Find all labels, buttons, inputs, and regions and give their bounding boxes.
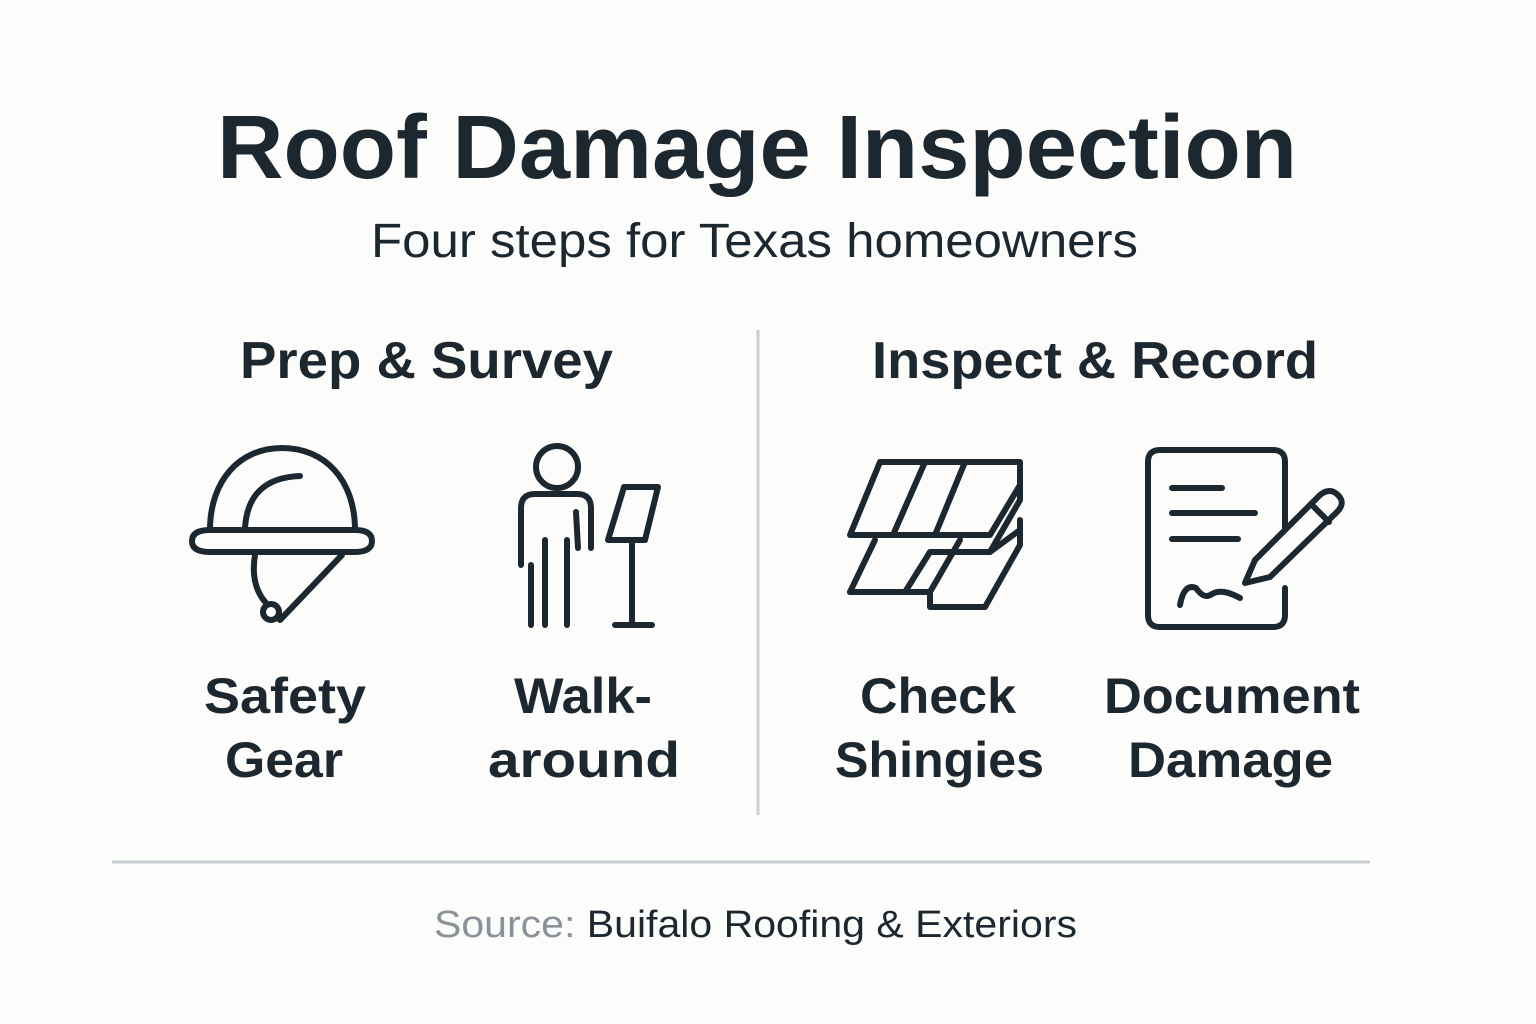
icon: safety helmet: [192, 448, 372, 620]
label: Walk-around: around: [488, 732, 680, 788]
label: Safety Gear: Safety: [204, 668, 366, 724]
label: Document Damage: Damage: [1128, 732, 1333, 788]
subtitle: Four steps for Texas homeowners: [371, 215, 1138, 268]
label: Check Shingies: Shingies: [835, 732, 1044, 788]
heading: Inspect & Record: Inspect & Record: [872, 332, 1318, 390]
label: Check Shingies: [835, 668, 1044, 788]
label: Safety Gear: Gear: [225, 732, 343, 788]
label: Safety Gear: [204, 668, 366, 788]
label: Document Damage: [1104, 668, 1360, 788]
title: Roof Damage Inspection: [217, 98, 1297, 198]
source: Source: Buifalo Roofing & Exteriors: [434, 904, 1077, 946]
label: Walk-around: Walk-: [514, 668, 652, 724]
heading: Prep & Survey: Prep & Survey: [240, 332, 613, 390]
icon: shingles: [850, 462, 1020, 607]
icon: walk-around person with sign: [521, 446, 658, 625]
label: Walk-around: [488, 668, 680, 788]
label: Document Damage: Document: [1104, 668, 1360, 724]
icon: document with pencil: [1148, 450, 1342, 627]
label: Check Shingies: Check: [860, 668, 1016, 724]
